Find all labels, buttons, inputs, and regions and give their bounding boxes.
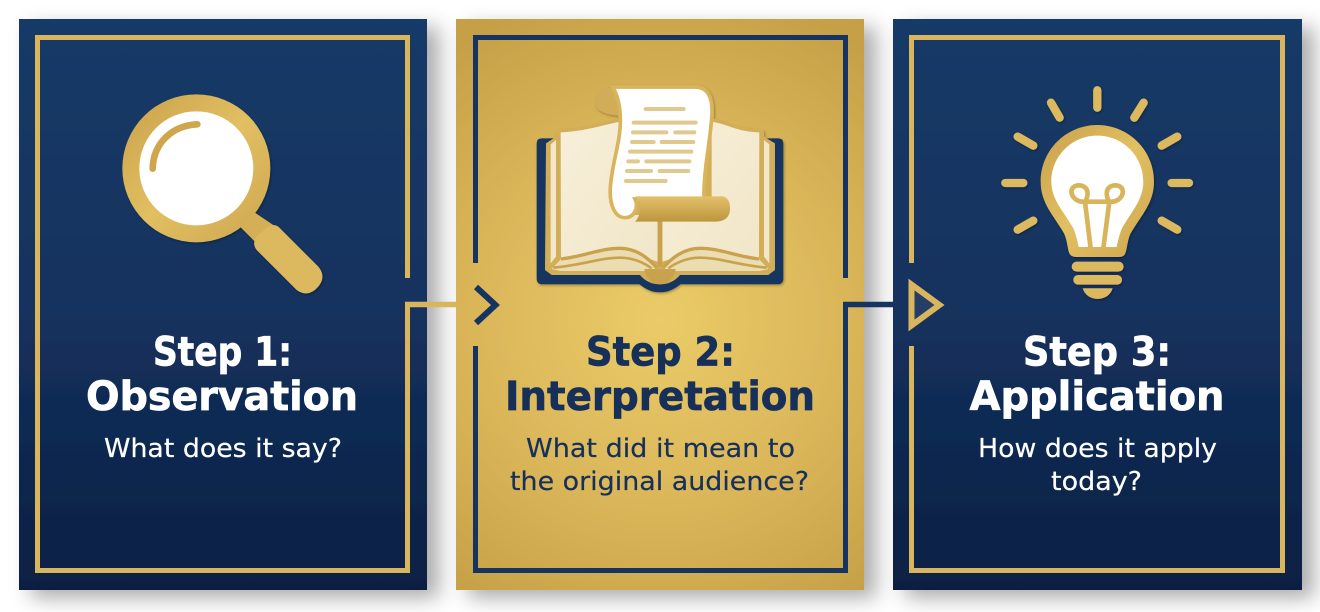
arrow: step 1 to step 2 xyxy=(405,287,496,323)
icon: magnifying glass xyxy=(122,94,322,293)
arrow: step 2 to step 3 xyxy=(843,284,940,326)
panel: step 2 interpretation xyxy=(456,19,864,590)
panel: step 3 application xyxy=(893,19,1302,590)
question: step 3 xyxy=(978,434,1217,497)
panel: step 1 observation xyxy=(19,19,427,590)
heading: application: Application xyxy=(970,374,1224,420)
question: step 3: How does it apply xyxy=(978,434,1217,464)
heading: observation: Observation xyxy=(86,374,358,420)
icon: open book and scroll xyxy=(537,87,783,292)
question: step 2: the original audience? xyxy=(510,467,809,497)
heading: interpretation: Interpretation xyxy=(505,374,815,420)
question: step 3: today? xyxy=(1051,467,1142,497)
icon: light bulb xyxy=(1005,90,1189,299)
question: step 2 xyxy=(510,434,809,497)
heading: step 1: Step 1: xyxy=(153,330,292,376)
question: step 1: What does it say? xyxy=(104,434,342,464)
heading: step 3: Step 3: xyxy=(1023,330,1171,376)
heading: step 2: Step 2: xyxy=(586,330,735,376)
question: step 2: What did it mean to xyxy=(526,434,795,464)
